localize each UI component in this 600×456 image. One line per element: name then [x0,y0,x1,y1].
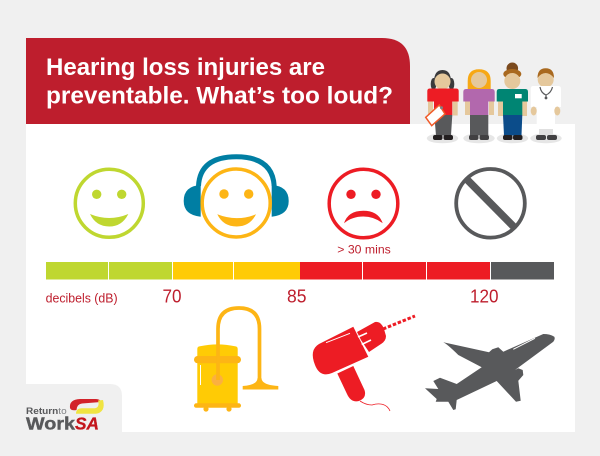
worker: red shirt with clipboard [426,70,459,143]
icon: power drill [313,316,415,411]
title line 2: preventable. What’s too loud? [46,82,393,110]
label: 85: 85 [287,286,306,307]
panel: white content [26,124,575,432]
logo text: Return to: Returnto [26,406,67,417]
icon: prohibition sign [456,169,525,238]
decibel scale bar [46,262,554,280]
icon: smiley with headphones [184,157,289,237]
label: 120: 120 [470,286,498,307]
worker: doctor [530,68,562,143]
worker: green uniform [497,63,528,143]
headband [198,157,274,186]
panel: logo tab [26,384,122,432]
logo text: SA: SA [75,413,99,433]
worker: purple shirt [463,69,495,143]
label: decibels: decibels (dB) [46,292,118,306]
label: 70: 70 [162,286,182,307]
panel: red header [26,38,410,124]
label: over 30 mins: > 30 mins [337,243,391,257]
title: Hearing loss injuries are [46,54,325,81]
icon: workers group [426,63,562,143]
icon: sad face [329,169,398,238]
icon: airplane [425,334,555,410]
logo swoosh [70,399,104,414]
icon: clipboard [426,105,445,126]
icon: vacuum cleaner [194,308,278,412]
logo text: Work: Work [26,413,75,433]
icon: green smiley [75,169,143,237]
logo: ReturnToWorkSA [26,399,104,433]
